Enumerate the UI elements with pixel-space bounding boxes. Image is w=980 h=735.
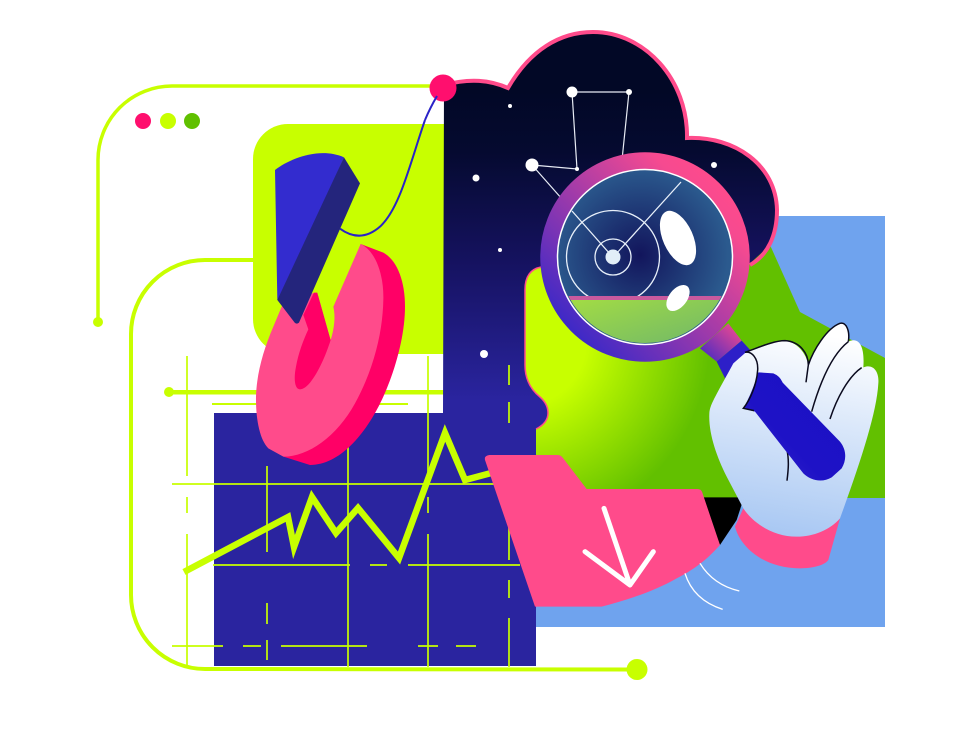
wedge wire [340, 120, 425, 236]
black wedge [700, 497, 744, 545]
lens lower band [568, 296, 722, 343]
magnifier collar [717, 341, 752, 382]
magnifier lens [548, 160, 742, 356]
chart zigzag line [184, 433, 495, 572]
background blue panel [536, 216, 885, 627]
pie hole [295, 293, 331, 389]
green field panel [525, 245, 885, 498]
pink connector dot [430, 74, 456, 102]
constellation [526, 86, 632, 259]
lens glare small [662, 281, 694, 315]
glove outline [745, 323, 862, 481]
magnifier neck [700, 323, 742, 362]
motion lines [685, 563, 739, 609]
radar rings [566, 182, 681, 304]
glove [709, 323, 878, 537]
wire to dot [425, 96, 437, 120]
lower frame line [131, 260, 648, 680]
pie side [283, 244, 405, 465]
browser window dots [135, 113, 200, 129]
pie chart piece and wedge [256, 120, 425, 465]
folder and hand group [485, 323, 878, 609]
stars [472, 104, 717, 358]
top browser frame line [93, 86, 442, 327]
horizontal connector lines [164, 387, 444, 405]
chart panel [214, 413, 536, 666]
cloud pink outline [444, 32, 777, 265]
green field pink edge [525, 267, 548, 429]
lens glare large [653, 205, 703, 271]
lens white rim [557, 169, 733, 345]
grip [743, 372, 845, 480]
pie gap [317, 288, 337, 340]
blue wedge top [275, 153, 344, 300]
lime rounded panel [253, 124, 446, 354]
illustration: data analysis with magnifier [93, 30, 885, 680]
folder [485, 455, 720, 607]
radar centre [606, 250, 620, 264]
pie face [256, 244, 383, 457]
folder arrow [585, 508, 653, 585]
magnifier ring [548, 160, 742, 354]
night sky cloud [443, 32, 777, 440]
lens glass [558, 170, 732, 344]
sleeve cuff [735, 508, 840, 568]
chart grid lines [172, 356, 520, 667]
wedge side [277, 157, 360, 324]
thumb outline [743, 352, 758, 411]
